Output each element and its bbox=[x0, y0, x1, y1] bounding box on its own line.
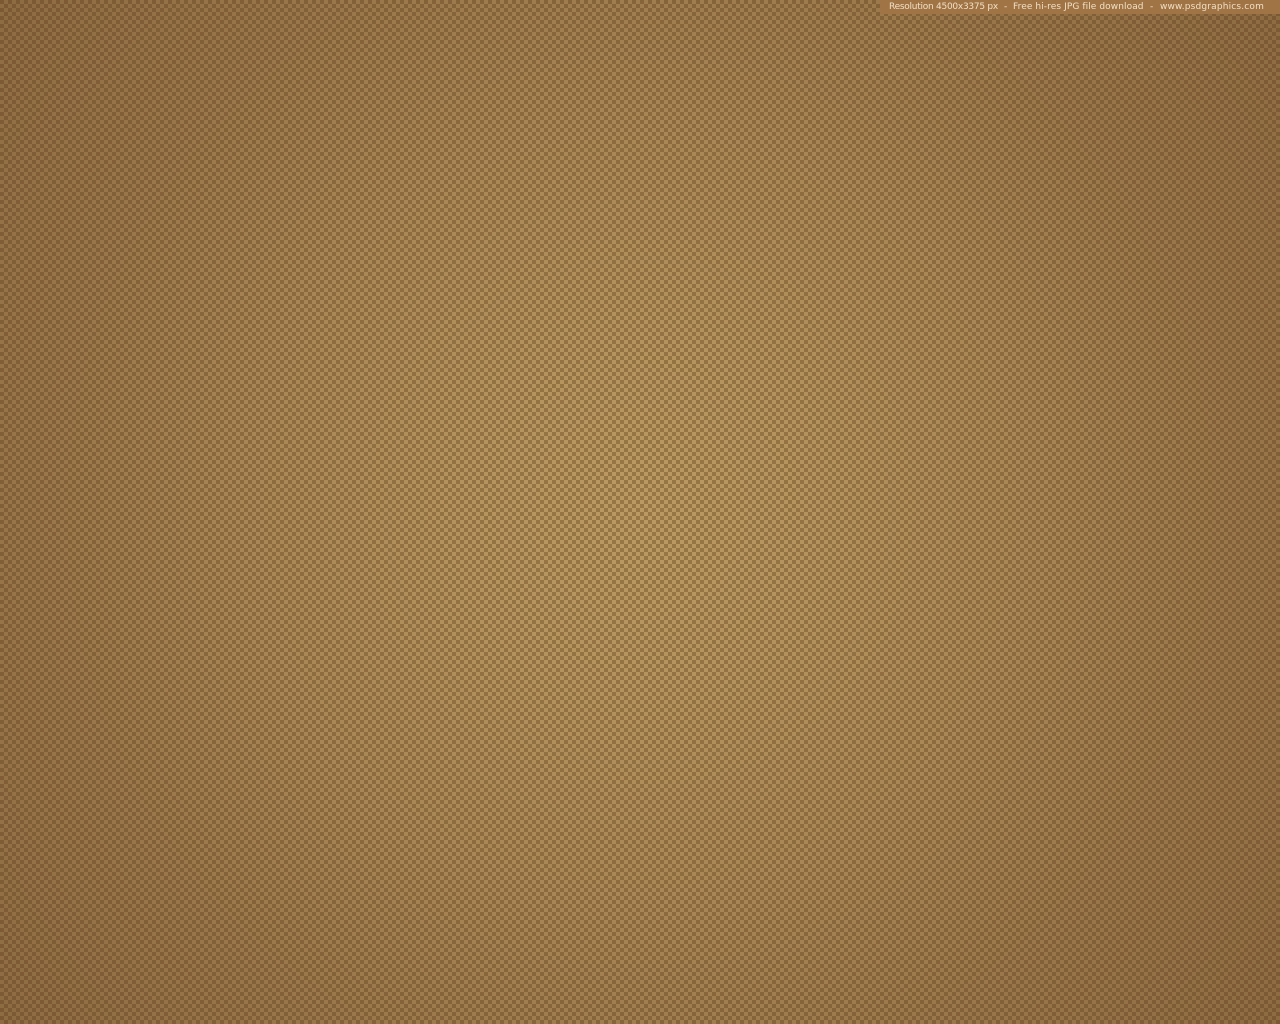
banner text: Free hi-res JPG file download bbox=[1013, 2, 1144, 12]
banner text: Resolution 4500x3375 px bbox=[889, 2, 998, 12]
banner text: www.psdgraphics.com bbox=[1160, 2, 1264, 12]
banner text: - bbox=[1150, 2, 1153, 12]
banner text bbox=[889, 2, 1264, 12]
banner text: - bbox=[1004, 2, 1007, 12]
top-right resolution banner bbox=[880, 0, 1280, 14]
